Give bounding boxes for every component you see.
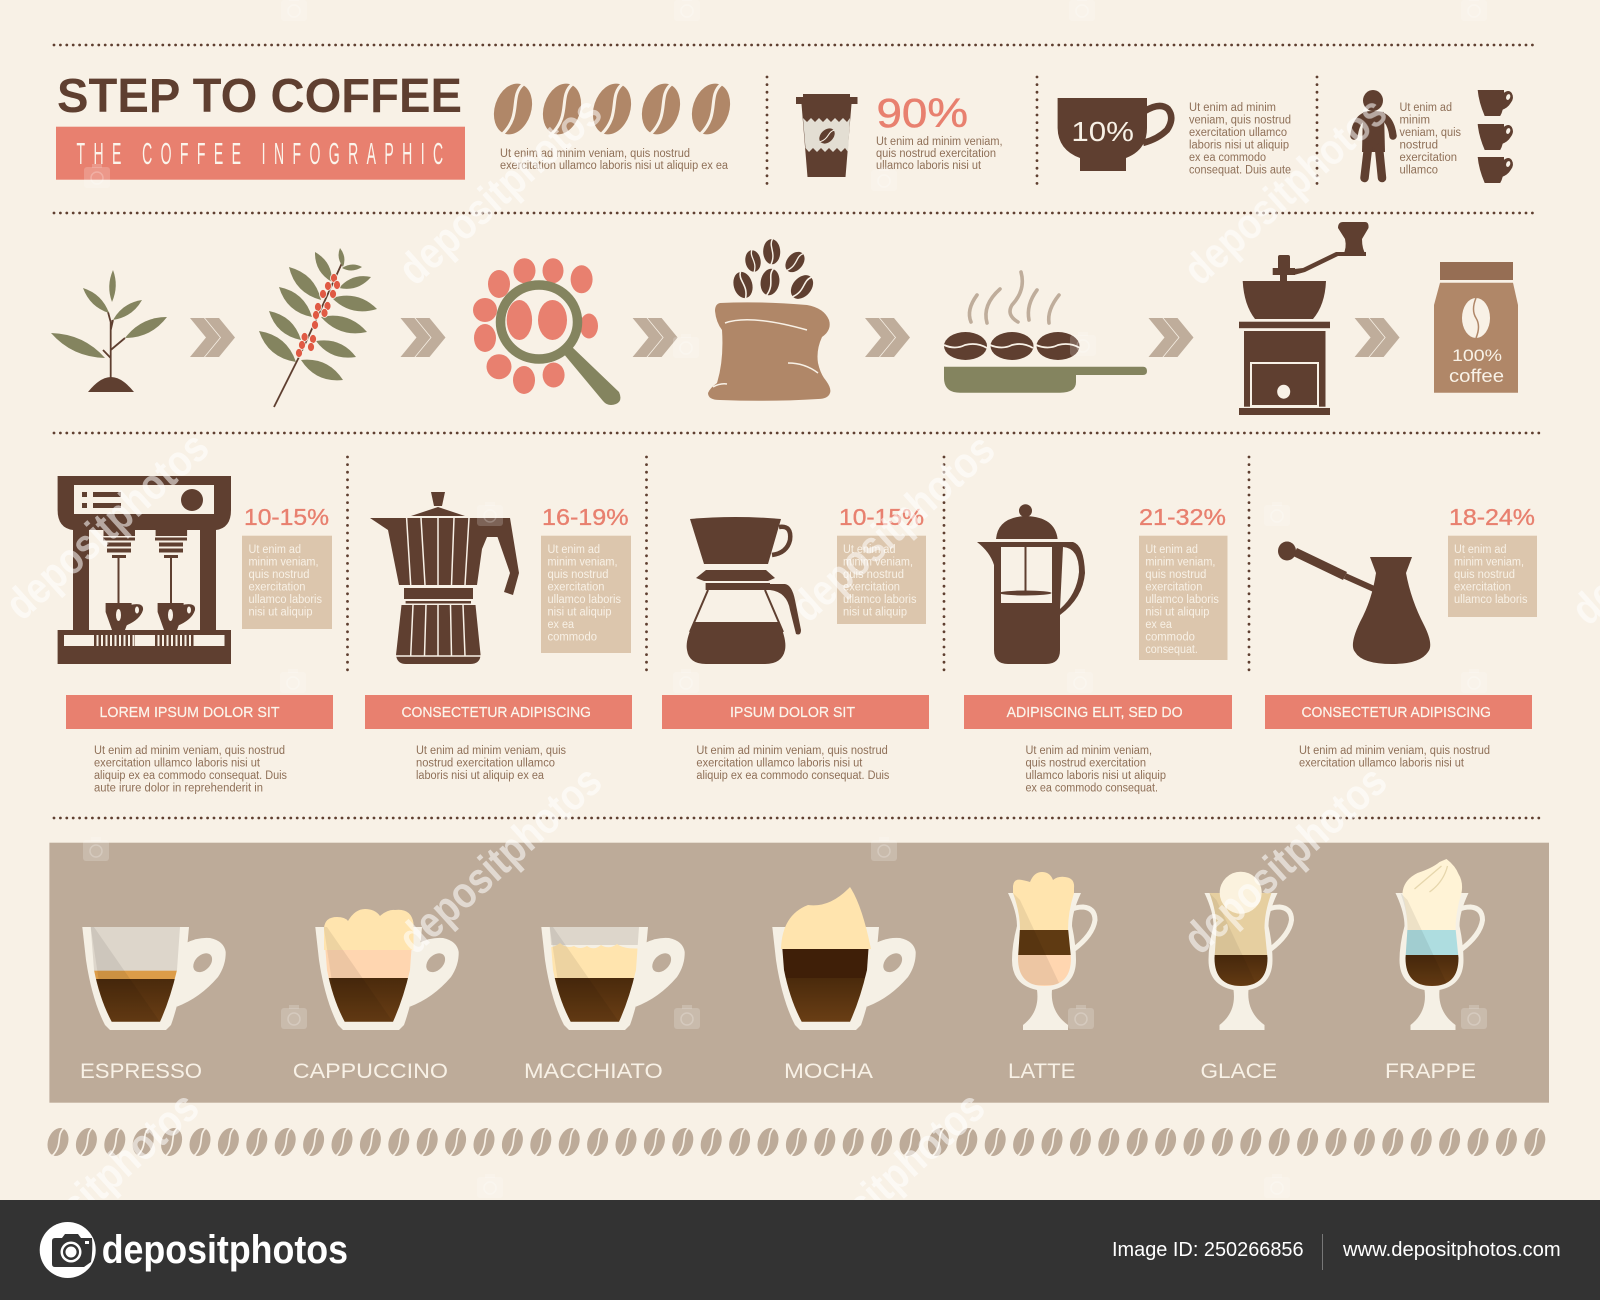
arrow — [190, 318, 235, 357]
stat: takeaway cup 90%: 90% — [876, 90, 968, 136]
description — [696, 745, 890, 782]
watermarks: depositphotos — [772, 1082, 994, 1289]
description: aute irure dolor in reprehenderit in — [94, 782, 263, 794]
stat: person and three cups: Ut enim ad — [1400, 102, 1452, 114]
drink: mocha — [772, 887, 916, 1083]
note box: Ut enim ad — [1145, 544, 1198, 556]
method 2: moka pot column — [365, 492, 632, 782]
description: aliquip ex ea commodo consequat. Duis — [696, 770, 890, 782]
arrow — [865, 318, 910, 357]
note box: nisi ut aliquip — [548, 606, 612, 618]
note box: quis nostrud — [548, 569, 608, 581]
note box: exercitation — [248, 582, 306, 594]
note box: exercitation — [548, 582, 604, 594]
process step: seedling — [51, 270, 167, 392]
stat: person and three cups — [1354, 90, 1513, 183]
description: ex ea commodo consequat. — [1026, 782, 1158, 794]
subtitle banner — [56, 127, 465, 180]
stat: takeaway cup 90%: ullamco laboris nisi ut — [876, 160, 982, 172]
description — [1299, 745, 1490, 770]
watermarks: depositphotos — [1174, 756, 1396, 963]
icon: coffee cup — [1058, 98, 1171, 171]
note box: minim veniam, — [843, 556, 913, 568]
watermarks: depositphotos — [782, 424, 1004, 631]
banner: ADIPISCING ELIT, SED DO — [1007, 704, 1183, 721]
stat: person and three cups: ullamco — [1400, 164, 1438, 176]
note box: consequat. — [1145, 644, 1198, 656]
drink: espresso: ESPRESSO — [80, 1060, 202, 1083]
banner — [1265, 695, 1532, 729]
note box: ex ea — [548, 619, 575, 631]
note box: quis nostrud — [1454, 569, 1515, 581]
method 1: espresso machine column: 10-15% — [244, 504, 329, 530]
note box: commodo — [548, 632, 597, 644]
method 4: french press column: 21-32% — [1139, 504, 1226, 530]
process step: coffee grinder — [1239, 222, 1369, 415]
stat: cup 10%: exercitation ullamco — [1189, 127, 1287, 139]
drink: glace — [1200, 872, 1292, 1083]
note box — [541, 536, 631, 653]
stat: cup 10%: laboris nisi ut aliquip — [1189, 140, 1289, 152]
banner: LOREM IPSUM DOLOR SIT — [100, 704, 280, 721]
description: laboris nisi ut aliquip ex ea — [416, 770, 545, 782]
roasted beans — [944, 332, 1080, 360]
watermarks: depositphotos — [389, 87, 611, 294]
banner — [964, 695, 1232, 729]
subtitle banner: THE COFFEE INFOGRAPHIC — [76, 138, 443, 172]
process step: coffee branch — [259, 248, 377, 407]
note box: quis nostrud — [248, 569, 310, 581]
note box: Ut enim ad — [548, 544, 600, 556]
arrow — [1148, 318, 1194, 357]
icon: pour-over carafe — [687, 517, 801, 664]
stat: cup 10%: Ut enim ad minim — [1189, 102, 1276, 114]
method 2: moka pot column: 16-19% — [542, 504, 629, 530]
method 3: pour-over carafe column: 10-15% — [839, 504, 924, 530]
drink: frappe — [1385, 859, 1482, 1083]
stat: five beans — [488, 79, 736, 172]
description: exercitation ullamco laboris nisi ut — [1299, 758, 1465, 770]
note box: minim veniam, — [1454, 556, 1524, 568]
drink: espresso — [80, 925, 226, 1083]
process step: roasting pan — [944, 272, 1147, 393]
beans above sack — [724, 234, 820, 306]
description: ullamco laboris nisi ut aliquip — [1026, 770, 1166, 782]
arrow — [633, 318, 678, 357]
note box: quis nostrud — [843, 569, 904, 581]
stat: person and three cups: veniam, quis — [1400, 127, 1461, 139]
icon: coffee cup: 10% — [1071, 116, 1134, 147]
icon: cezve — [1278, 542, 1430, 664]
drink: latte: LATTE — [1008, 1060, 1076, 1083]
icon: moka pot — [370, 492, 519, 664]
icon: espresso machine — [58, 476, 231, 664]
stat: five beans: Ut enim ad minim veniam, quis nostrud — [500, 148, 690, 160]
stat: takeaway cup 90% — [796, 90, 1002, 177]
stat: takeaway cup 90%: quis nostrud exercitation — [876, 148, 996, 160]
drink: glace: GLACE — [1200, 1060, 1277, 1083]
note box: ullamco laboris — [1145, 594, 1219, 606]
method 1: espresso machine column — [58, 476, 333, 794]
banner — [66, 695, 333, 729]
berries — [296, 274, 340, 358]
icon: logo camera — [40, 1222, 96, 1278]
icon: french press — [977, 504, 1085, 664]
note box — [1139, 536, 1228, 660]
note box: nisi ut aliquip — [1145, 606, 1209, 618]
watermarks: depositphotos — [1174, 87, 1396, 294]
stat: cup 10%: veniam, quis nostrud — [1189, 114, 1291, 126]
steam — [969, 272, 1059, 323]
note box — [242, 536, 332, 629]
decorative bean strip — [44, 1125, 1549, 1159]
description — [1026, 745, 1166, 794]
note box: commodo — [1145, 632, 1195, 644]
note box: minim veniam, — [1145, 556, 1215, 568]
drink: latte — [1008, 872, 1095, 1083]
process step: coffee bag: 100% — [1452, 346, 1502, 365]
footer bar: www.depositphotos.com — [1342, 1239, 1561, 1261]
icon: person — [1354, 90, 1393, 178]
description: Ut enim ad minim veniam, quis nostrud — [1299, 745, 1490, 757]
stat: person and three cups: exercitation — [1400, 152, 1457, 164]
description — [416, 745, 566, 782]
watermarks: depositphotos — [0, 422, 218, 629]
banner — [365, 695, 632, 729]
drink: cappuccino: CAPPUCCINO — [293, 1060, 448, 1083]
note box: minim veniam, — [248, 556, 318, 568]
stat: five beans: exercitation ullamco laboris nisi ut aliquip ex ea — [500, 160, 729, 172]
method 3: pour-over carafe column — [662, 504, 929, 782]
process step: coffee bag: coffee — [1449, 365, 1504, 386]
banner — [662, 695, 929, 729]
icon: three small cups — [1478, 90, 1513, 183]
arrow — [1355, 318, 1400, 357]
method 5: cezve column — [1265, 504, 1537, 770]
footer bar — [0, 1200, 1600, 1300]
banner: CONSECTETUR ADIPISCING — [402, 704, 591, 721]
note box: Ut enim ad — [248, 544, 301, 556]
note box: exercitation — [1145, 582, 1202, 594]
drink: macchiato — [524, 925, 685, 1083]
note box: nisi ut aliquip — [843, 606, 907, 618]
description: aliquip ex ea commodo consequat. Duis — [94, 770, 287, 782]
note box: ullamco laboris — [1454, 594, 1528, 606]
note box: exercitation — [843, 582, 900, 594]
description: quis nostrud exercitation — [1026, 758, 1146, 770]
description — [94, 745, 287, 794]
description: exercitation ullamco laboris nisi ut — [94, 758, 261, 770]
stat: person and three cups: minim — [1400, 114, 1430, 126]
horizontal dotted dividers — [54, 45, 1541, 818]
stat: person and three cups: nostrud — [1400, 140, 1438, 152]
description: Ut enim ad minim veniam, — [1026, 745, 1152, 757]
banner: IPSUM DOLOR SIT — [730, 704, 855, 721]
note box: quis nostrud — [1145, 569, 1206, 581]
icon: takeaway cup — [796, 94, 858, 177]
footer bar: Image ID: 250266856 — [1112, 1239, 1304, 1261]
drink: mocha: MOCHA — [784, 1060, 873, 1083]
process step: sack of beans — [708, 234, 830, 401]
note box: nisi ut aliquip — [248, 606, 312, 618]
method 4: french press column — [964, 504, 1232, 794]
note box: ullamco laboris — [548, 594, 621, 606]
description: Ut enim ad minim veniam, quis — [416, 745, 566, 757]
panel: coffee drinks — [49, 843, 1549, 1103]
watermarks: depositphotos — [389, 756, 611, 963]
description: Ut enim ad minim veniam, quis nostrud — [696, 745, 888, 757]
arrow — [400, 318, 446, 357]
drink: frappe: FRAPPE — [1385, 1060, 1476, 1083]
title: STEP TO COFFEE — [57, 70, 462, 123]
note box — [1448, 536, 1537, 617]
note box: ullamco laboris — [248, 594, 322, 606]
footer bar: depositphotos — [102, 1228, 348, 1272]
note box — [837, 536, 926, 624]
process step: magnifier over beans — [473, 258, 620, 405]
description: exercitation ullamco laboris nisi ut — [696, 758, 863, 770]
description: Ut enim ad minim veniam, quis nostrud — [94, 745, 285, 757]
note box: ex ea — [1145, 619, 1172, 631]
stat: cup 10%: consequat. Duis aute — [1189, 164, 1291, 176]
stat: takeaway cup 90%: Ut enim ad minim veniam, — [876, 136, 1002, 148]
note box: minim veniam, — [548, 556, 618, 568]
note box: Ut enim ad — [843, 544, 896, 556]
note box: exercitation — [1454, 582, 1511, 594]
stat: cup 10% — [1058, 98, 1291, 176]
drink: macchiato: MACCHIATO — [524, 1060, 663, 1083]
method 5: cezve column: 18-24% — [1449, 504, 1535, 530]
stat: cup 10%: ex ea commodo — [1189, 152, 1266, 164]
banner: CONSECTETUR ADIPISCING — [1302, 704, 1491, 721]
note box: Ut enim ad — [1454, 544, 1506, 556]
description: nostrud exercitation ullamco — [416, 758, 555, 770]
drink: cappuccino — [293, 909, 459, 1083]
note box: ullamco laboris — [843, 594, 917, 606]
process step: coffee bag — [1434, 262, 1518, 393]
